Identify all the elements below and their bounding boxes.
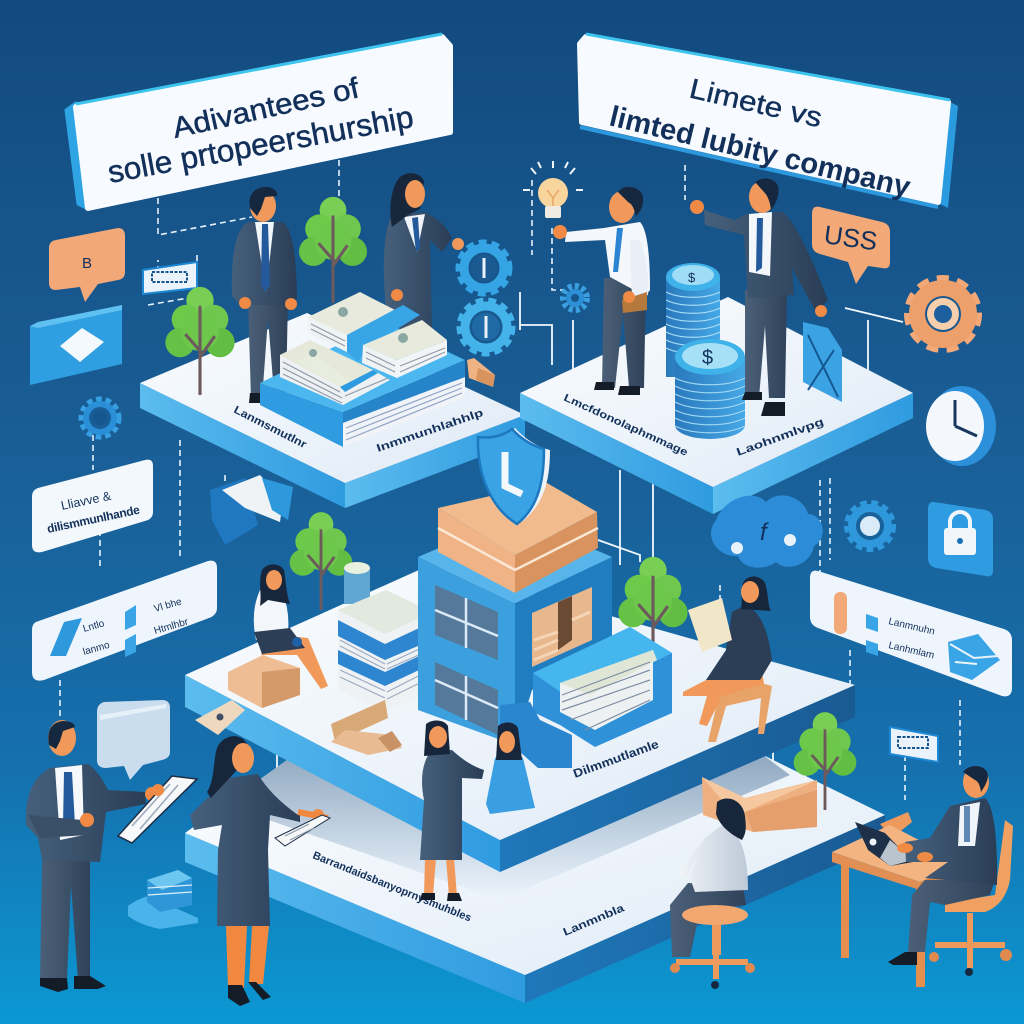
person: man with white shirt, holding bulb <box>553 187 650 395</box>
callout: left feature card: Vl bhe <box>153 596 184 615</box>
panel: top-left platform <box>140 313 525 508</box>
icon: coin stacks: $ <box>702 347 713 369</box>
icon: light bulb <box>523 161 583 218</box>
icon: stacked books with money, left platform <box>260 292 465 447</box>
label: left platform left: Lanmsmutlnr <box>232 404 309 451</box>
person: woman, bottom-left <box>190 736 328 1006</box>
icon: tree mid-right <box>618 557 688 665</box>
person: seated woman, left <box>228 564 328 708</box>
person: man, top-left <box>232 187 297 403</box>
icon: tree top-center <box>299 197 367 303</box>
title: left banner: solle prtopeershurship <box>105 99 416 190</box>
person: seated woman, bottom-right <box>670 798 755 989</box>
person: woman, center <box>420 720 484 901</box>
icon: small tag right <box>890 727 938 762</box>
title: right banner <box>580 34 958 208</box>
label: right platform left: Lmcfdonolaphmmage <box>562 392 690 459</box>
callout: left feature card: Htmlhbr <box>153 616 190 637</box>
callout: left feature card: Lntlo <box>82 618 106 635</box>
person: man at desk <box>888 766 1013 976</box>
icon: small gear left <box>83 401 117 435</box>
icon: blue cloud gear shape <box>711 495 823 568</box>
person: woman, top-center <box>384 173 464 330</box>
title: left banner: Adivantees of <box>170 72 363 145</box>
icon: desk with laptop <box>832 812 963 987</box>
icon: orange speech bubble B: B <box>82 255 92 272</box>
label: bottom platform right: Lanmnbla <box>561 902 627 939</box>
person: man, top-right <box>690 179 828 416</box>
icon: tree top-left <box>165 287 235 395</box>
panel: middle platform <box>185 565 855 872</box>
title: right banner: limted lubity company <box>606 101 913 204</box>
icon: tree bottom-right <box>794 712 856 810</box>
icon: padlock tile <box>928 502 993 576</box>
solid connector lines <box>265 292 903 880</box>
icon: folded documents left <box>210 475 293 545</box>
label: bottom platform left: Barrandaidsbanyoprnysmuhbles <box>311 850 473 924</box>
icon: blue envelope folder <box>803 322 842 402</box>
icon: coin stack mid-left <box>344 562 370 604</box>
icon: document in hand <box>118 776 197 843</box>
icon: paper note <box>195 700 245 735</box>
icon: tree mid-left <box>290 512 352 610</box>
callout: left feature card <box>32 561 217 681</box>
icon: bricks <box>331 700 402 755</box>
icon: paper in woman's hand <box>275 815 330 846</box>
callout: left note: Lliavve & <box>60 489 113 513</box>
icon: orange USS speech bubble: USS <box>822 219 879 256</box>
dashed connector lines <box>60 160 960 800</box>
icon: gear right <box>849 505 891 547</box>
callout: right feature card: Lanmnuhn <box>887 616 936 638</box>
icon: money stack, mid-left <box>338 590 432 712</box>
person: seated woman reading <box>683 576 772 742</box>
person: man, bottom-left <box>26 720 159 992</box>
icon: central building <box>418 483 612 745</box>
panel: bottom platform <box>185 755 885 1003</box>
icon: small tag <box>143 262 197 294</box>
icon: open box <box>702 777 817 832</box>
callout: left note: dilismmunlhande <box>46 503 141 536</box>
icon: orange speech bubble B <box>49 228 125 302</box>
icon: orange USS speech bubble <box>812 207 890 284</box>
icon: speech bubble bottom-left <box>97 700 170 780</box>
icon: money stack, mid-right <box>500 627 672 768</box>
person: small woman, center <box>486 722 535 814</box>
icon: orange gear <box>913 284 973 344</box>
callout: left feature card: lanmo <box>82 640 111 658</box>
label: middle platform: Dilmmutlamle <box>571 737 661 781</box>
callout: right feature card: Lanhmlam <box>887 640 935 661</box>
title: left banner <box>66 34 450 208</box>
icon: stack of papers bottom-left <box>128 870 198 929</box>
icon: coin stacks: $ <box>688 270 696 285</box>
label: left platform right: Inmmunhlahhlp <box>375 407 485 455</box>
panel: top-right platform <box>520 297 913 514</box>
callout: right feature card <box>810 571 1012 696</box>
icon: gears center <box>461 245 587 351</box>
label: right platform right: Laohnmlvpg <box>735 416 825 459</box>
icon: small orange box <box>467 358 495 387</box>
icon: blue cloud gear shape: f <box>760 519 769 546</box>
icon: blue card with diamond <box>30 305 122 385</box>
title: right banner: Limete vs <box>687 73 825 133</box>
callout: left note <box>32 460 153 552</box>
icon: shield <box>478 428 550 525</box>
icon: clock <box>926 386 996 466</box>
icon: coin stacks <box>666 263 745 439</box>
